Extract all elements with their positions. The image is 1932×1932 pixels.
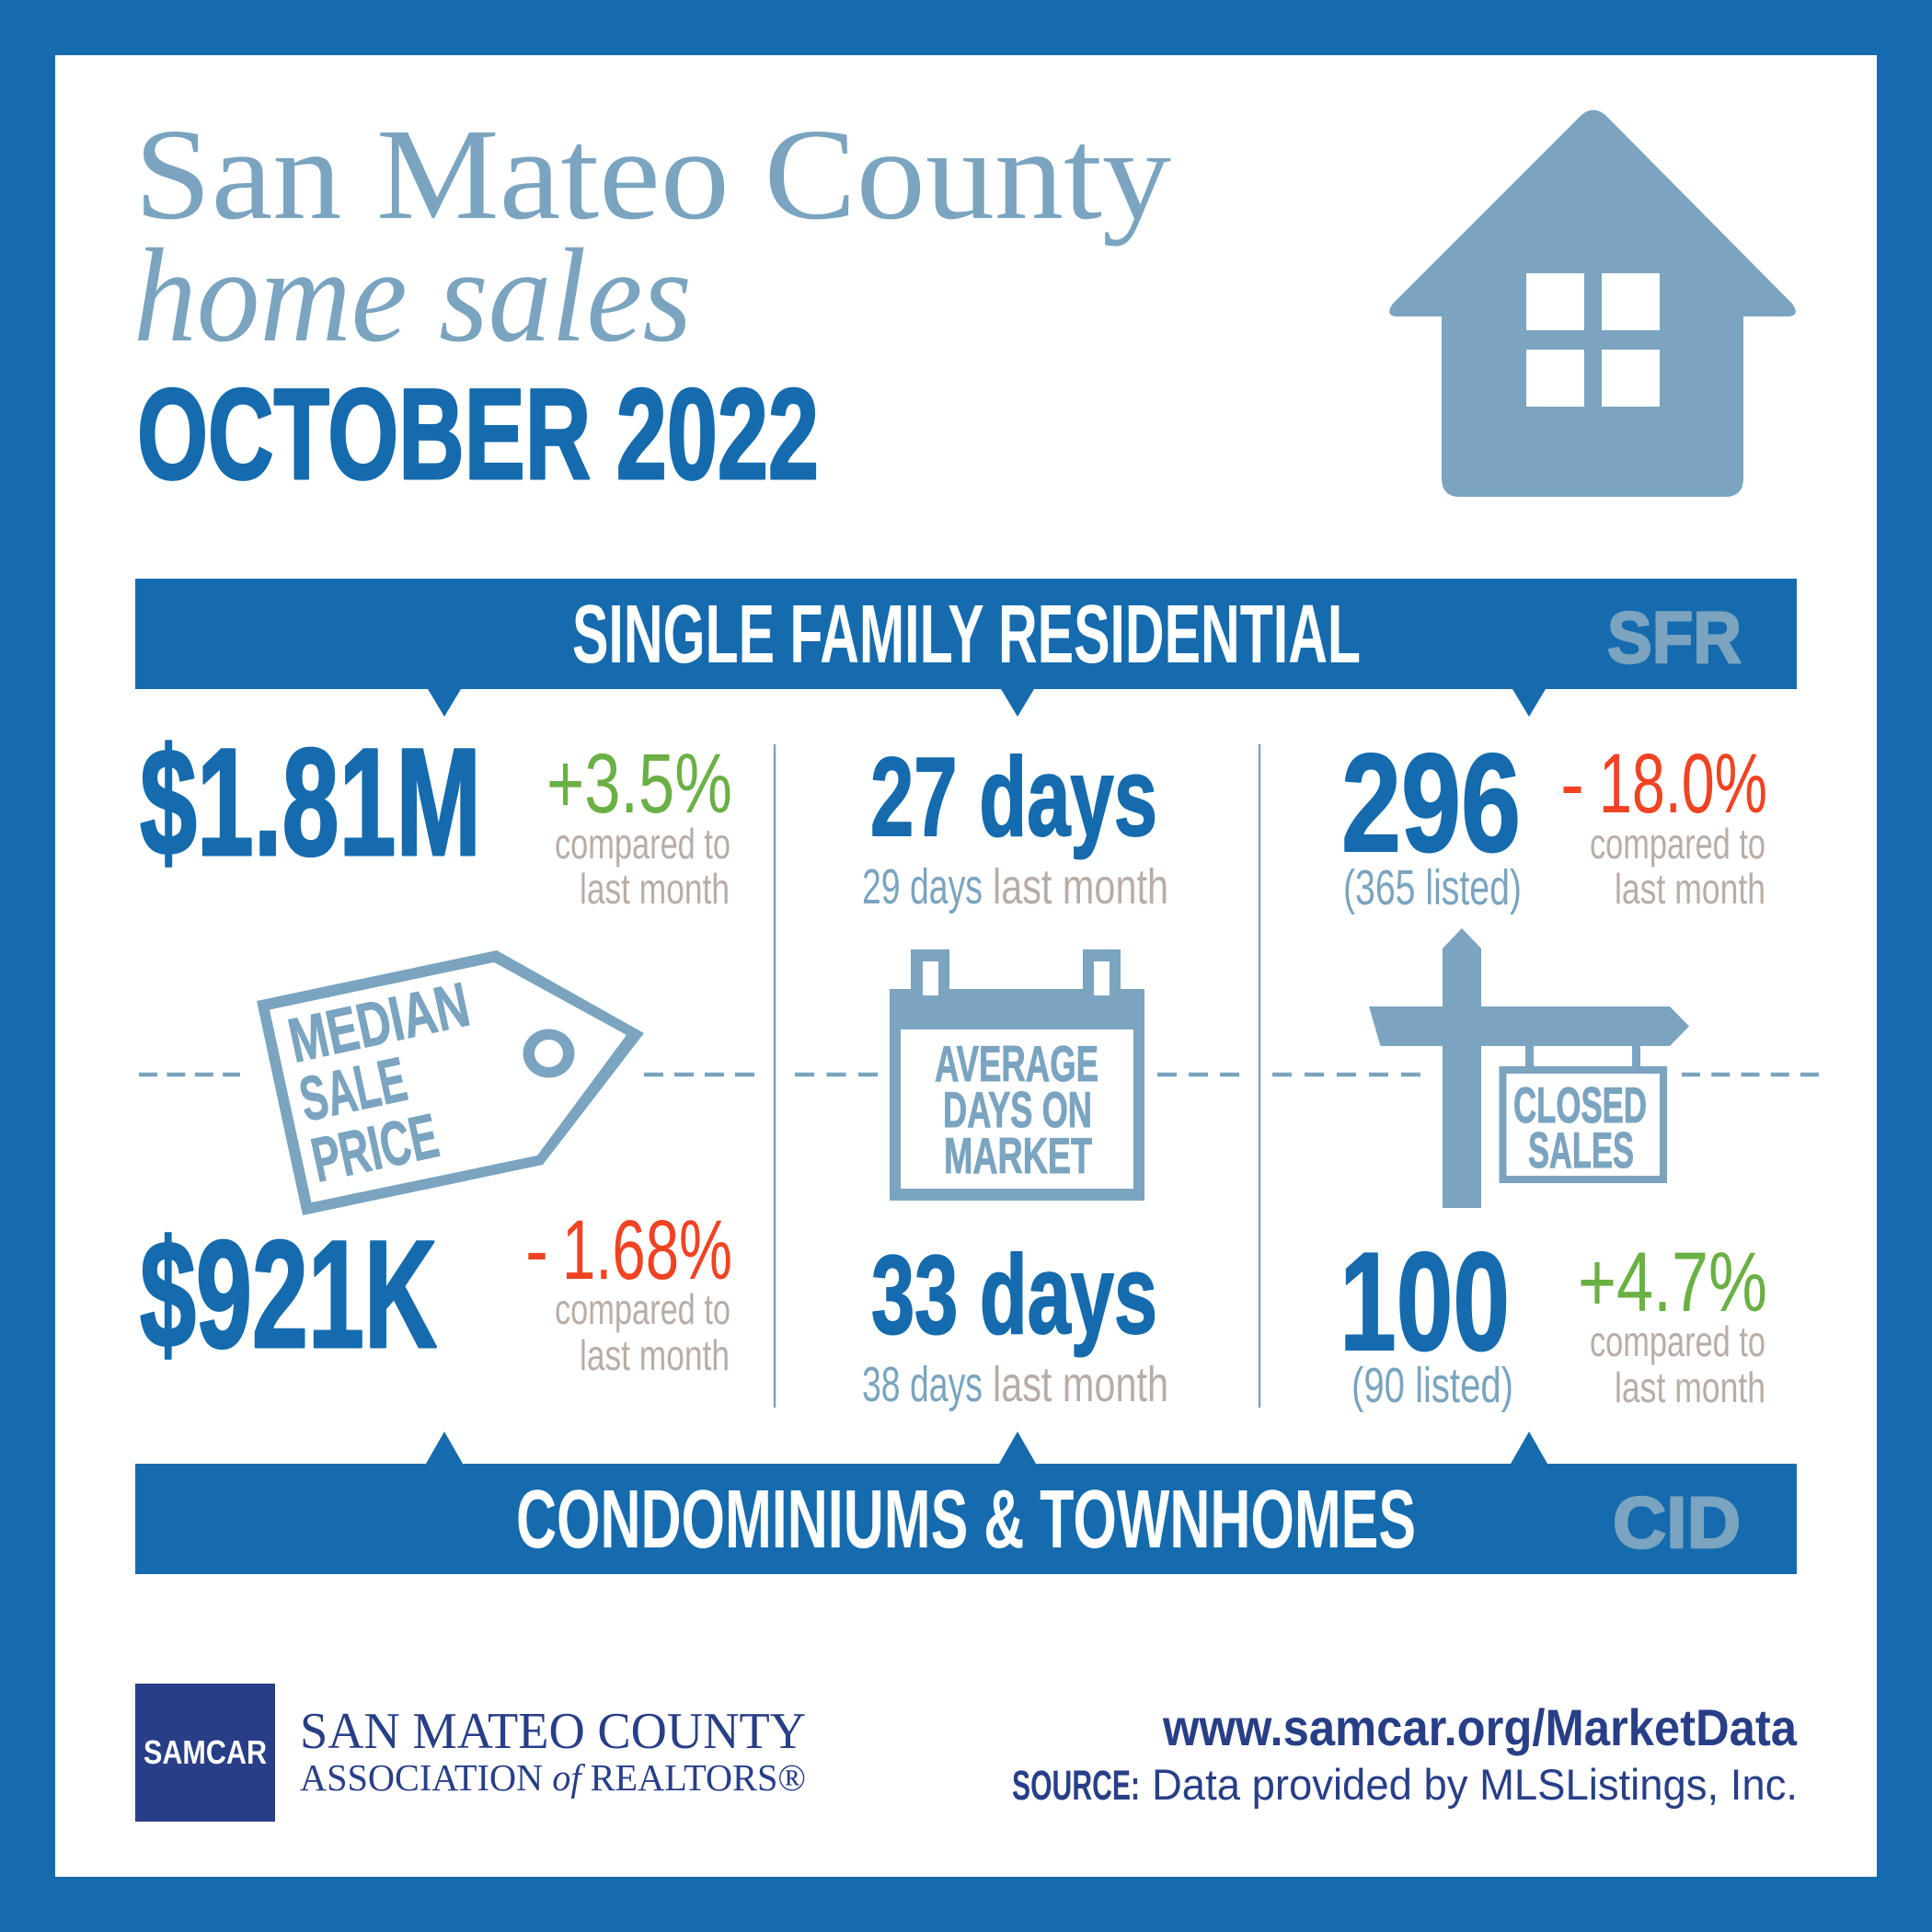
website and source [1012,1698,1798,1809]
CID median price: $921K [140,1210,437,1380]
association name [300,1703,806,1799]
title line: home sales: home sales [133,221,692,370]
tag label: PRICE [305,1100,444,1196]
SFR days comparison: last month [993,859,1168,914]
SFR days comparison: 29 days [862,859,983,914]
banner: single family residential [135,579,1797,717]
panel: closed sales [1340,725,1767,1413]
CID sales comparison label: last month [1615,1363,1765,1411]
SFR sales change: 18.0% [1599,737,1767,831]
icon: calendar [890,949,1144,1201]
CID days on market: 33 days [871,1232,1157,1357]
SFR closed sales: 296 [1341,725,1521,881]
banner: condominiums and townhomes [135,1432,1797,1574]
banner code: SFR: SFR [1607,596,1742,678]
association name: SAN MATEO COUNTY [300,1703,806,1760]
calendar label [935,1035,1098,1184]
calendar label: AVERAGE [935,1035,1098,1092]
CID days comparison [862,1357,1168,1412]
CID price change: 1.68% [562,1203,732,1297]
CID price comparison label [555,1285,730,1379]
SFR sales change: - [1560,737,1584,831]
panel: median sale price [140,718,732,1380]
CID price change [525,1203,732,1297]
tag label: MEDIAN [282,970,476,1076]
SFR price comparison label [555,820,730,913]
SFR median price: $1.81M [140,718,481,888]
CID sales comparison label [1590,1317,1765,1411]
CID price change: - [525,1203,548,1297]
CID price comparison label: last month [580,1331,730,1379]
SFR days on market: 27 days [870,734,1157,859]
title [133,101,1171,506]
title line: October 2022: OCTOBER 2022 [137,362,819,506]
association name: ASSOCIATION of REALTORS® [300,1756,806,1799]
SFR price change: +3.5% [546,737,732,831]
calendar label: MARKET [944,1127,1092,1184]
banner heading: single family residential: SINGLE FAMILY RESIDENTIAL [572,589,1361,681]
CID sales comparison label: compared to [1590,1317,1765,1365]
icon: price tag [257,950,644,1215]
SFR sales change [1560,737,1767,831]
title line: San Mateo County: San Mateo County [134,101,1171,247]
logo: SAMCAR: SAMCAR [144,1733,267,1771]
CID price comparison label: compared to [555,1285,730,1333]
SFR days comparison [862,859,1168,914]
CID days comparison: last month [993,1357,1168,1412]
SFR price comparison label: compared to [555,820,730,868]
sign label: CLOSED [1513,1076,1647,1133]
website url: www.samcar.org/MarketData [1162,1698,1798,1756]
CID sales change: +4.7% [1578,1236,1767,1329]
source credit: Data provided by MLSListings, Inc. [1152,1760,1798,1809]
SFR sales comparison label: compared to [1590,820,1765,868]
tag label: SALE [293,1044,413,1135]
icon: for-sale sign [1369,928,1689,1208]
SFR price comparison label: last month [580,865,730,913]
banner code: CID: CID [1613,1481,1741,1563]
CID days comparison: 38 days [862,1357,983,1412]
tag label [282,970,476,1196]
sign label [1513,1076,1647,1179]
SFR sales comparison label [1590,820,1765,913]
icon: house [1389,110,1796,497]
calendar label: DAYS ON [943,1081,1092,1138]
logo: SAMCAR [135,1684,806,1822]
SFR sales comparison label: last month [1615,865,1765,913]
banner heading: condominiums and townhomes: CONDOMINIUMS & TOWNHOMES [516,1474,1416,1566]
source credit: SOURCE: [1012,1762,1140,1809]
sign label: SALES [1528,1121,1634,1179]
CID closed sales: 100 [1340,1224,1510,1380]
panel: average days on market [862,734,1168,1412]
SFR listed count: (365 listed) [1343,860,1522,915]
CID listed count: (90 listed) [1351,1358,1513,1413]
